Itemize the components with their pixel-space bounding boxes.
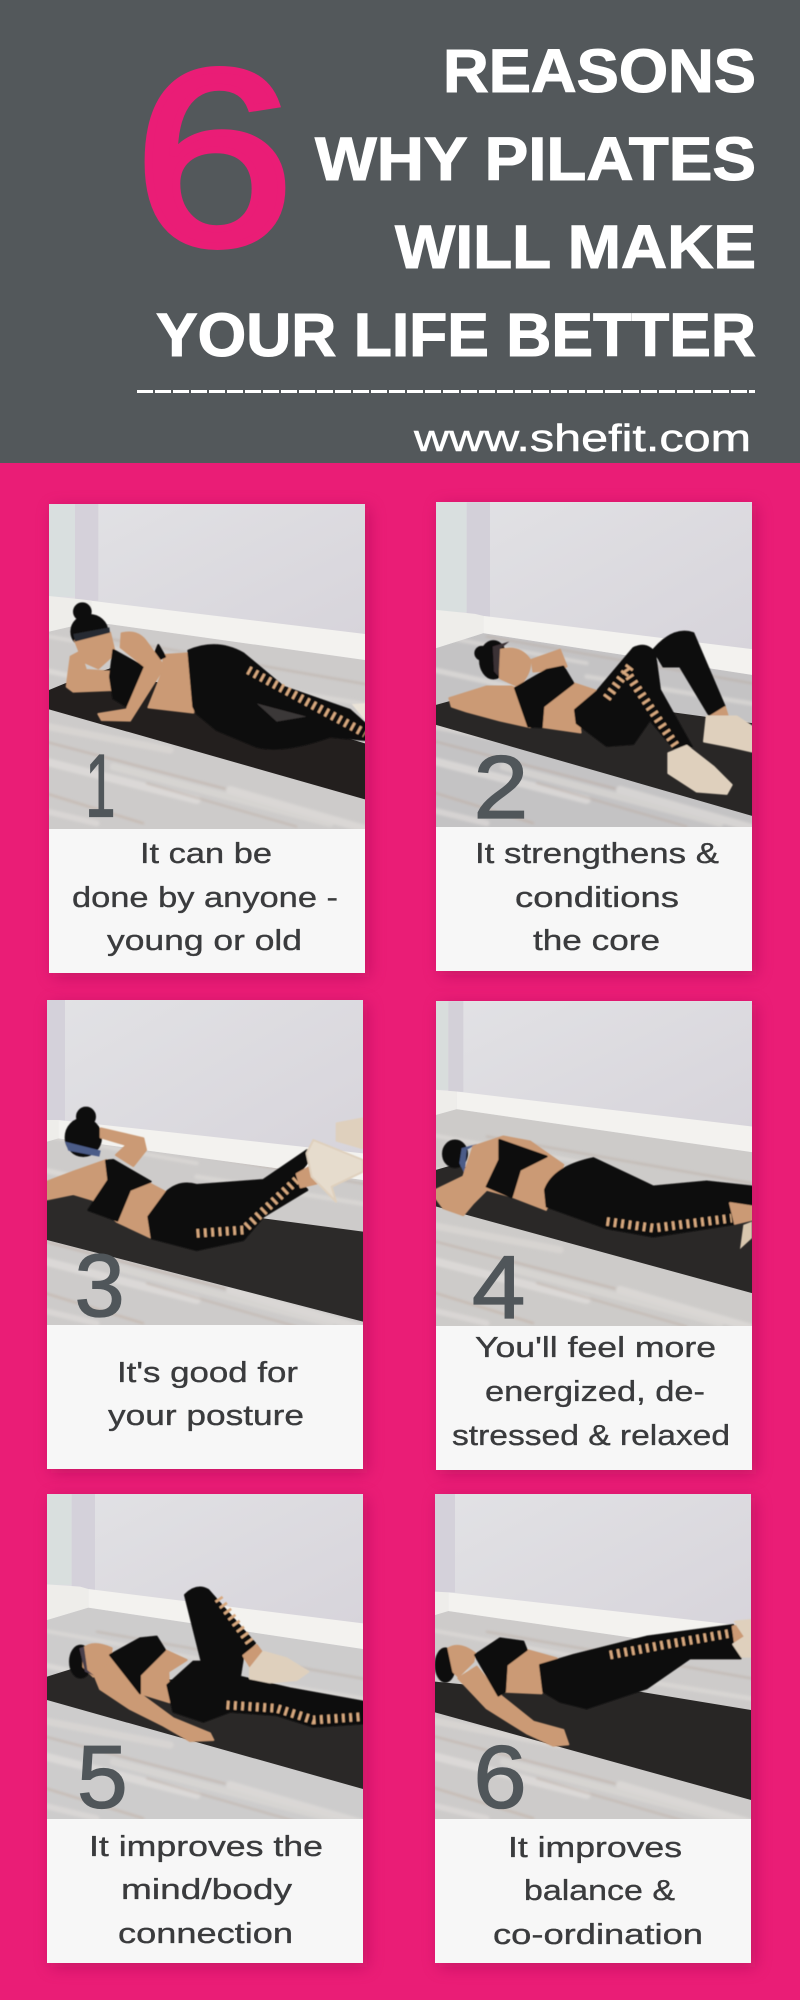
numeral 6: 6 xyxy=(473,1728,527,1827)
website: www.shefit.com xyxy=(413,418,751,460)
photo 3 xyxy=(47,1000,363,1335)
title: WHY PILATES xyxy=(315,125,756,193)
numeral 2: 2 xyxy=(473,738,528,837)
panel: reason 1 xyxy=(13,504,380,977)
caption 2: It strengthens & xyxy=(475,838,719,870)
photo 4 xyxy=(436,1001,752,1337)
numeral 4: 4 xyxy=(472,1238,525,1337)
panel: reason 4 xyxy=(403,1001,770,1474)
caption 1: It can be xyxy=(140,838,272,870)
caption 6 xyxy=(493,1832,703,1951)
caption 1 xyxy=(72,838,338,957)
header panel xyxy=(0,0,800,463)
woman with one knee raised xyxy=(70,1588,363,1741)
photo 6 xyxy=(435,1494,751,1827)
caption 2: conditions xyxy=(515,882,679,914)
caption 5: mind/body xyxy=(121,1874,293,1906)
woman with legs raised xyxy=(436,1620,751,1746)
caption 4: energized, de- xyxy=(485,1376,705,1408)
caption 3: It's good for xyxy=(117,1357,298,1389)
caption 6: balance & xyxy=(524,1875,675,1907)
photo 1 xyxy=(49,504,365,836)
numeral 5: 5 xyxy=(77,1727,128,1826)
numeral 1: 1 xyxy=(85,737,115,836)
caption 5 xyxy=(89,1831,323,1950)
caption 4: You'll feel more xyxy=(475,1332,716,1364)
woman doing crunch xyxy=(449,632,752,794)
photo 2 xyxy=(436,502,752,837)
woman lying face down xyxy=(436,1136,752,1249)
panel: reason 5 xyxy=(13,1494,380,1967)
caption 1: done by anyone - xyxy=(72,882,338,914)
panel: reason 2 xyxy=(403,502,770,975)
caption 2 xyxy=(475,838,719,957)
caption 4: stressed & relaxed xyxy=(452,1420,730,1452)
woman in back extension xyxy=(47,1108,363,1250)
numeral 3: 3 xyxy=(75,1236,125,1335)
title: WILL MAKE xyxy=(395,213,756,281)
panel: reason 3 xyxy=(13,1000,380,1473)
caption 6: co-ordination xyxy=(493,1919,703,1951)
big pink 6: 6 xyxy=(134,18,294,297)
caption 4 xyxy=(452,1332,730,1452)
caption 5: connection xyxy=(118,1918,293,1950)
caption 2: the core xyxy=(533,925,660,957)
caption 3: your posture xyxy=(108,1400,304,1432)
title: YOUR LIFE BETTER xyxy=(156,301,756,369)
panel: reason 6 xyxy=(403,1494,770,1967)
caption 1: young or old xyxy=(107,925,302,957)
title xyxy=(156,37,756,369)
caption 3 xyxy=(108,1357,304,1432)
caption 6: It improves xyxy=(508,1832,682,1864)
photo 5 xyxy=(47,1494,363,1826)
title: REASONS xyxy=(443,37,756,105)
caption 5: It improves the xyxy=(89,1831,323,1863)
woman on her side xyxy=(67,603,365,749)
